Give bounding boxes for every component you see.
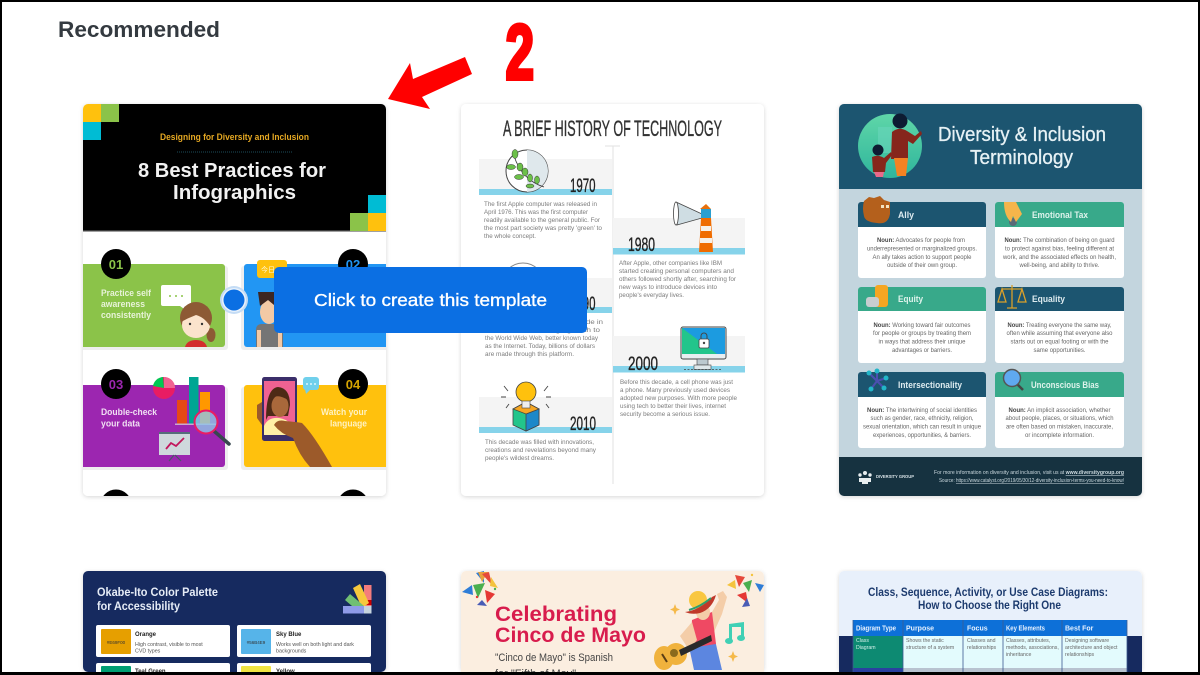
term card: Emotional Tax: work, and the associated effects on health, [1002, 254, 1116, 261]
card header: black banner: 8 Best Practices for [138, 160, 326, 182]
comparison table: architecture and object [1065, 645, 1118, 651]
comparison table: Shows the static [906, 638, 944, 644]
term card: Equity: for people or groups by treating them [873, 330, 971, 337]
icon: hand holding phone [257, 377, 332, 467]
term card: Equality: often while assuming that everyone also [1006, 330, 1113, 337]
comparison table: Diagram Type [856, 626, 896, 632]
icon: connected nodes [866, 368, 888, 392]
card header [839, 104, 1142, 189]
icon: bar chart with magnifier [175, 377, 229, 444]
term card: Unconscious Bias [995, 370, 1124, 448]
icon: balance scales [998, 285, 1026, 308]
timeline entry 1980: 1980 [628, 235, 655, 256]
comparison table: Classes and [967, 638, 996, 644]
term card: Unconscious Bias: about people, places, or situations, which [1006, 415, 1114, 422]
tip 02: blue panel: 今日 [261, 265, 275, 274]
term card: Ally: Ally [898, 210, 915, 221]
term card: Emotional Tax [995, 202, 1124, 278]
arrow: red pointer to first card [388, 57, 472, 109]
panel: Class, Sequence, Activity diagrams template card: How to Choose the Right One [918, 598, 1061, 612]
card header: black banner: Designing for Diversity and Inclusion [160, 132, 309, 143]
button: Click to create this template [274, 267, 587, 333]
comparison table: methods, associations, [1006, 645, 1059, 651]
timeline entry 1980: new ways to introduce devices into [619, 284, 717, 291]
palette row: Sky Blue: Works well on both light and dark [276, 642, 354, 648]
timeline entry 1970 [479, 150, 612, 240]
timeline entry 1990: In the 1990s, a leap was made in [488, 319, 603, 326]
term card: Emotional Tax: Emotional Tax [1032, 210, 1089, 221]
term card: Equity: Noun: Working toward fair outcomes [874, 322, 971, 329]
subtitle: "Cinco de Mayo" is Spanish [495, 652, 613, 664]
tip 01: green panel: 01 [109, 257, 123, 272]
palette row: Orange [96, 625, 230, 657]
tip 01: green panel: Practice self [101, 288, 152, 298]
term card: Intersectionality: sexual orientation, which can result in unique [863, 424, 981, 430]
timeline entry 1990: the World Wide Web, better known today [485, 335, 599, 342]
timeline entry 1990: 1990 [570, 294, 596, 315]
logo: Diversity Group [858, 471, 872, 484]
timeline entry 2000 [613, 327, 745, 418]
icon: presentation board [159, 432, 190, 461]
tip 04: yellow panel: Watch your [321, 407, 367, 417]
illustration: guitarist with sombrero [654, 591, 727, 670]
palette row: Orange: CVD types [135, 648, 161, 654]
tip 03: purple panel [80, 369, 229, 470]
term card: Equality [995, 285, 1124, 363]
button: Click to create this template: Click to create this template [314, 290, 547, 310]
timeline entry 2010: people's wildest dreams. [485, 455, 554, 462]
timeline entry 2000: using tech to better their lives, internet [620, 403, 726, 410]
comparison table: structure of a system [906, 645, 954, 651]
panel: Okabe-Ito Color Palette template card: Okabe-Ito Color Palette [97, 585, 218, 599]
comparison table: inheritance [1006, 652, 1031, 658]
panel: Okabe-Ito Color Palette template card [83, 571, 386, 675]
hover control: blue dot [220, 286, 248, 314]
term card: Equality: Equality [1032, 294, 1066, 305]
timeline entry 2000: 2000 [628, 354, 658, 375]
timeline entry 1970: readily available to the general public. For [484, 217, 601, 224]
term card: Emotional Tax: Noun: The combination of being on guard [1004, 237, 1115, 244]
timeline entry 1970: April 1976. This was the first computer [484, 209, 589, 216]
timeline entry 1980: After Apple, other companies like IBM [619, 260, 722, 267]
figures: adult and child [872, 114, 922, 177]
term card: Intersectionality [858, 368, 986, 448]
term card: Ally: Noun: Advocates for people from [877, 237, 965, 244]
tip 01: green panel: consistently [101, 310, 151, 320]
term card: Equity: advantages or barriers. [892, 347, 952, 354]
term card: Equity [858, 285, 986, 363]
term card: Ally [858, 196, 986, 278]
card footer: Source: https://www.catalyst.org/2019/05/30/12-diversity-inclusion-terms-you-need-to-know/ [939, 478, 1125, 484]
icon: music notes [725, 622, 745, 644]
timeline entry 1980 [613, 202, 745, 299]
term card: Intersectionality: Intersectionality [898, 380, 963, 391]
tip 03: purple panel: Double-check [101, 407, 158, 417]
heading: Recommended: Recommended [58, 17, 220, 42]
timeline entry 1990: are made through this platform. [485, 351, 574, 358]
timeline entry 1990: as the Internet. Today, billions of dollars [485, 343, 596, 350]
tip 03: purple panel: your data [101, 418, 141, 428]
timeline entry 1980: people's everyday lives. [619, 292, 684, 299]
card footer [839, 457, 1142, 496]
timeline entry 2010: 2010 [570, 414, 596, 435]
palette row: Orange: #E69F00 [107, 640, 126, 645]
comparison table: Diagram [856, 645, 876, 651]
tip 02: blue panel: 02 [346, 257, 360, 272]
panel: Celebrating Cinco de Mayo template card: Cinco de Mayo [495, 624, 646, 647]
term card: Equality: same opportunities. [1034, 347, 1086, 354]
comparison table: relationships [1065, 652, 1095, 658]
palette row: Sky Blue [237, 625, 371, 657]
timeline entry 1970: 1970 [570, 176, 596, 197]
timeline entry 1970: the whole concept. [484, 233, 536, 240]
figure: girl [180, 302, 216, 347]
comparison table: Designing software [1065, 638, 1109, 644]
term card: Ally: An ally takes action to support people [872, 254, 972, 261]
comparison table: Key Elements [1006, 626, 1045, 632]
panel: 8 Best Practices template card [80, 104, 389, 520]
timeline entry 2000: security become a serious issue. [620, 411, 710, 418]
sparkles [670, 604, 738, 662]
annotation: red number 2: 2 [506, 9, 534, 97]
comparison table: relationships [967, 645, 997, 651]
icon: plant in circle [506, 150, 548, 192]
panel: Class, Sequence, Activity diagrams template card: Class, Sequence, Activity, or Use Case Diagrams: [868, 585, 1108, 599]
icon: lighthouse with beam [674, 202, 713, 252]
term card: Unconscious Bias: Noun: An implicit association, whether [1008, 407, 1111, 414]
term card: Emotional Tax: well-being, and ability to thrive. [1019, 262, 1100, 269]
card header: Terminology [970, 147, 1073, 169]
term card: Intersectionality: such as gender, race, ethnicity, religion, [870, 415, 974, 422]
next tips row: cropped number circles [103, 490, 366, 496]
comparison table: Best For [1065, 626, 1094, 632]
term card: Equity: Equity [898, 294, 924, 305]
timeline entry 1970: the most part society was pretty 'green' to [484, 225, 602, 232]
timeline entry 1990: the decade saw huge growth to [488, 327, 600, 334]
card header: black banner [83, 104, 386, 232]
palette row: Teal Green: Teal Green [135, 669, 166, 675]
tip 04: yellow panel [241, 369, 389, 470]
card footer: DIVERSITY GROUP [876, 474, 914, 479]
palette row: Sky Blue: backgrounds [276, 648, 307, 654]
icon: coin stacks [866, 285, 888, 307]
tip 04: yellow panel: language [330, 418, 367, 428]
term card: Ally: underrepresented or marginalized groups. [867, 246, 977, 252]
timeline entry 2000: adopted new purposes. With more people [620, 395, 737, 402]
bunting left [462, 571, 498, 606]
comparison table [853, 620, 1127, 674]
card header: black banner: Infographics [173, 182, 296, 204]
timeline entry 2010: This decade was filled with innovations, [485, 439, 594, 446]
comparison table: Classes, attributes, [1006, 638, 1050, 644]
timeline entry 2000: a phone. Many previously used devices [620, 387, 731, 394]
tip 04: yellow panel: 04 [346, 377, 361, 392]
palette row: Orange: Orange [135, 632, 157, 638]
timeline entry 2010: creations and revelations beyond many [485, 447, 597, 454]
panel: A Brief History of Technology template card [461, 104, 764, 496]
term card: Emotional Tax: to protect against bias, feeling different at [1005, 246, 1114, 252]
tip 03: purple panel: 03 [109, 377, 123, 392]
term card: Equity: in ways that address their unique [878, 338, 966, 346]
term card: Unconscious Bias: Unconscious Bias [1031, 380, 1099, 391]
panel: Diversity & Inclusion Terminology template card [839, 104, 1142, 496]
panel: Class, Sequence, Activity diagrams template card [839, 571, 1142, 674]
term card: Intersectionality: Noun: The intertwining of social identities [867, 407, 978, 414]
card footer: For more information on diversity and inclusion, visit us at www.diversitygroup.org [934, 470, 1124, 476]
palette row: Orange: High contrast, visible to most [135, 642, 203, 648]
term card: Unconscious Bias: or incomplete information. [1025, 432, 1094, 439]
card header: Diversity & Inclusion [938, 124, 1106, 146]
tip 01: green panel: awareness [101, 299, 145, 309]
timeline entry 2000: Before this decade, a cell phone was just [620, 379, 733, 386]
term card: Equality: starts out on equal footing or with the [1010, 338, 1109, 346]
palette row: Sky Blue: #56B4E9 [247, 640, 266, 645]
term card: Ally: outside of their own group. [887, 262, 957, 269]
timeline entry 2010 [479, 382, 612, 462]
icon: raised fist [863, 196, 890, 223]
timeline axis [605, 146, 620, 484]
icon: pie chart [153, 377, 175, 399]
term card: Intersectionality: experiences, opportunities, & barriers. [873, 432, 971, 439]
panel: Celebrating Cinco de Mayo template card [461, 571, 764, 675]
term card: Unconscious Bias: are often based on mistaken, inaccurate, [1006, 424, 1113, 430]
tip 02: blue panel [241, 249, 389, 350]
icon: monitor with lock [681, 327, 726, 370]
timeline entry 1980: started creating personal computers and [619, 268, 734, 275]
palette row: Teal Green [96, 663, 230, 672]
comparison table: Purpose [906, 626, 934, 632]
bunting right [727, 574, 764, 607]
palette row: Yellow [237, 663, 371, 672]
icon: light bulb in box [501, 382, 551, 431]
comparison table: Focus [967, 626, 988, 632]
timeline entry 1970: The first Apple computer was released in [484, 201, 597, 208]
timeline entry 1980: others followed shortly after, searching for [619, 276, 737, 283]
title: Celebrating [495, 603, 617, 626]
palette row: Sky Blue: Sky Blue [276, 632, 302, 638]
term card: Equality: Noun: Treating everyone the same way, [1008, 322, 1112, 329]
timeline entry 1990 [479, 263, 612, 358]
palette row: Yellow: Yellow [276, 669, 295, 675]
tip 01: green panel [80, 249, 228, 350]
comparison table: Class [856, 638, 869, 644]
icon: magnifying glass [1004, 370, 1023, 390]
icon: hand with coin [1004, 202, 1022, 226]
icon: colour swatch fan [343, 584, 372, 614]
card title: A BRIEF HISTORY OF TECHNOLOGY [503, 116, 722, 141]
panel: Okabe-Ito Color Palette template card: for Accessibility [97, 599, 180, 613]
